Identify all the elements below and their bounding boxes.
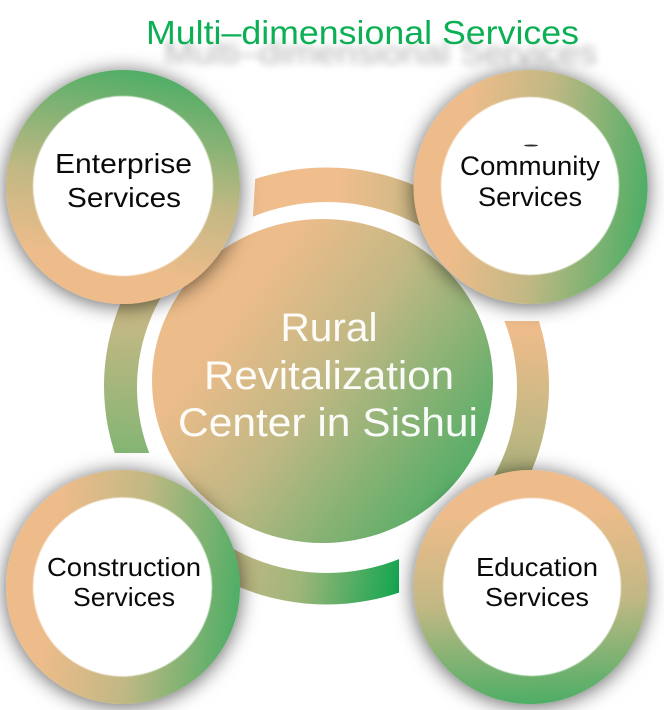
node: Enterprise Services: Services xyxy=(67,182,181,213)
node: Enterprise Services: Enterprise xyxy=(55,148,192,179)
node: Community Services xyxy=(414,70,648,304)
outer ring: bottom arc segment xyxy=(234,549,399,604)
center circle: Rural Revitalization Center in Sishui: Center in Sishui xyxy=(178,401,478,445)
center circle: Rural Revitalization Center in Sishui xyxy=(152,219,493,543)
outer ring: right arc segment xyxy=(494,321,549,476)
outer ring: left arc segment xyxy=(104,298,161,453)
center circle: Rural Revitalization Center in Sishui: Revitalization xyxy=(204,354,454,398)
node: Education Services: Education xyxy=(476,552,598,582)
node: Enterprise Services xyxy=(6,70,240,304)
node: Construction Services: Construction xyxy=(47,552,201,582)
node: Community Services: Community xyxy=(460,151,601,181)
node: Education Services xyxy=(414,470,648,704)
node: Construction Services xyxy=(6,470,240,704)
node: Education Services: Services xyxy=(485,582,589,612)
center circle: Rural Revitalization Center in Sishui: Rural xyxy=(280,306,378,350)
title: Multi–dimensional Services xyxy=(146,14,579,51)
node: Construction Services: Services xyxy=(73,582,175,612)
node: Community Services: Services xyxy=(478,182,582,212)
outer ring: top arc segment xyxy=(252,168,420,226)
